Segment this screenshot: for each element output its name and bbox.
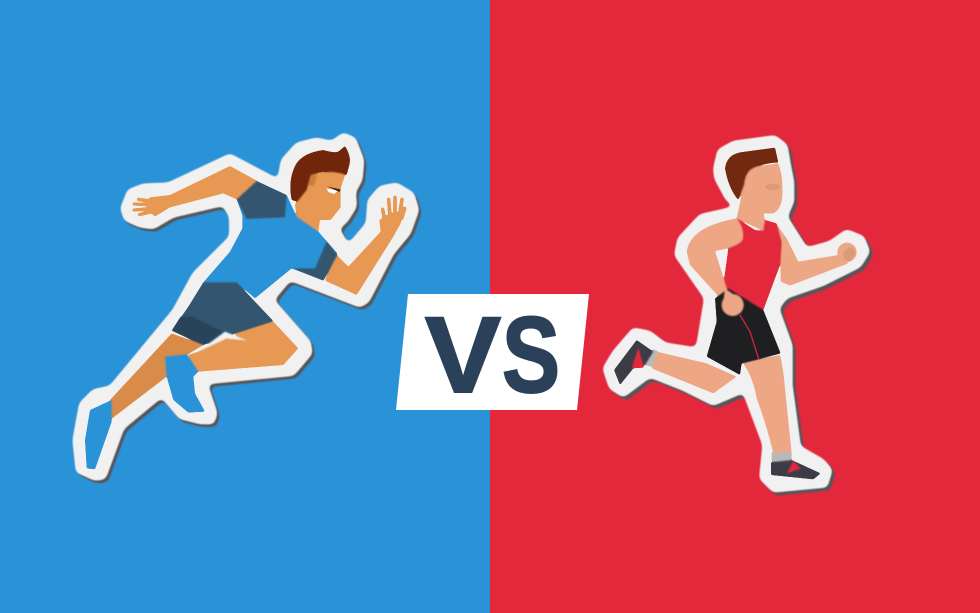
front sock xyxy=(772,452,792,462)
face and neck xyxy=(737,163,782,231)
sprinter body xyxy=(85,146,405,469)
tank top xyxy=(723,218,781,310)
shorts xyxy=(172,282,273,345)
VS badge xyxy=(396,294,589,415)
eye xyxy=(327,188,338,194)
front arm xyxy=(325,212,403,295)
front sleeve xyxy=(293,242,337,281)
right fist xyxy=(837,243,857,262)
back sleeve xyxy=(237,181,287,219)
panel: red right background xyxy=(490,0,980,613)
gap between legs xyxy=(198,332,247,352)
letter S: S xyxy=(502,294,560,415)
sticker shadow xyxy=(606,139,872,495)
sticker white outline xyxy=(603,136,869,492)
back shoe xyxy=(85,400,112,469)
back shoe red accent xyxy=(632,348,644,368)
VS text xyxy=(425,294,560,415)
eyebrow xyxy=(327,186,341,192)
front thigh xyxy=(188,322,298,372)
front leg xyxy=(743,355,792,453)
icon: sprinter sticker xyxy=(73,133,421,483)
neck and face xyxy=(295,170,347,232)
back leg xyxy=(110,333,203,420)
shorts xyxy=(707,288,781,375)
icon: jogger sticker xyxy=(603,136,872,495)
back arm xyxy=(147,166,257,217)
shorts red stripe xyxy=(740,315,759,359)
back hand fingers xyxy=(134,199,157,215)
front shoe xyxy=(771,460,821,479)
back sock xyxy=(645,349,658,367)
letter V: V xyxy=(425,294,501,415)
sticker white outline xyxy=(73,133,418,480)
ear xyxy=(308,173,317,186)
wrist xyxy=(723,288,737,302)
hair xyxy=(725,148,778,200)
right arm xyxy=(777,224,848,286)
left fist xyxy=(722,294,744,316)
front shoe xyxy=(165,354,205,413)
front shoe red accent xyxy=(787,461,801,474)
back leg xyxy=(652,352,737,393)
panel: blue left background xyxy=(0,0,490,613)
shorts shadow xyxy=(172,317,223,345)
hair xyxy=(290,146,350,202)
jogger body xyxy=(614,148,857,479)
nose shading xyxy=(765,184,780,190)
left arm xyxy=(687,218,743,302)
back shoe xyxy=(614,340,653,385)
shirt xyxy=(203,195,337,298)
front hand fingers xyxy=(383,197,405,222)
sticker shadow xyxy=(76,136,421,483)
badge parallelogram xyxy=(396,294,589,410)
fist knuckles xyxy=(843,247,856,262)
